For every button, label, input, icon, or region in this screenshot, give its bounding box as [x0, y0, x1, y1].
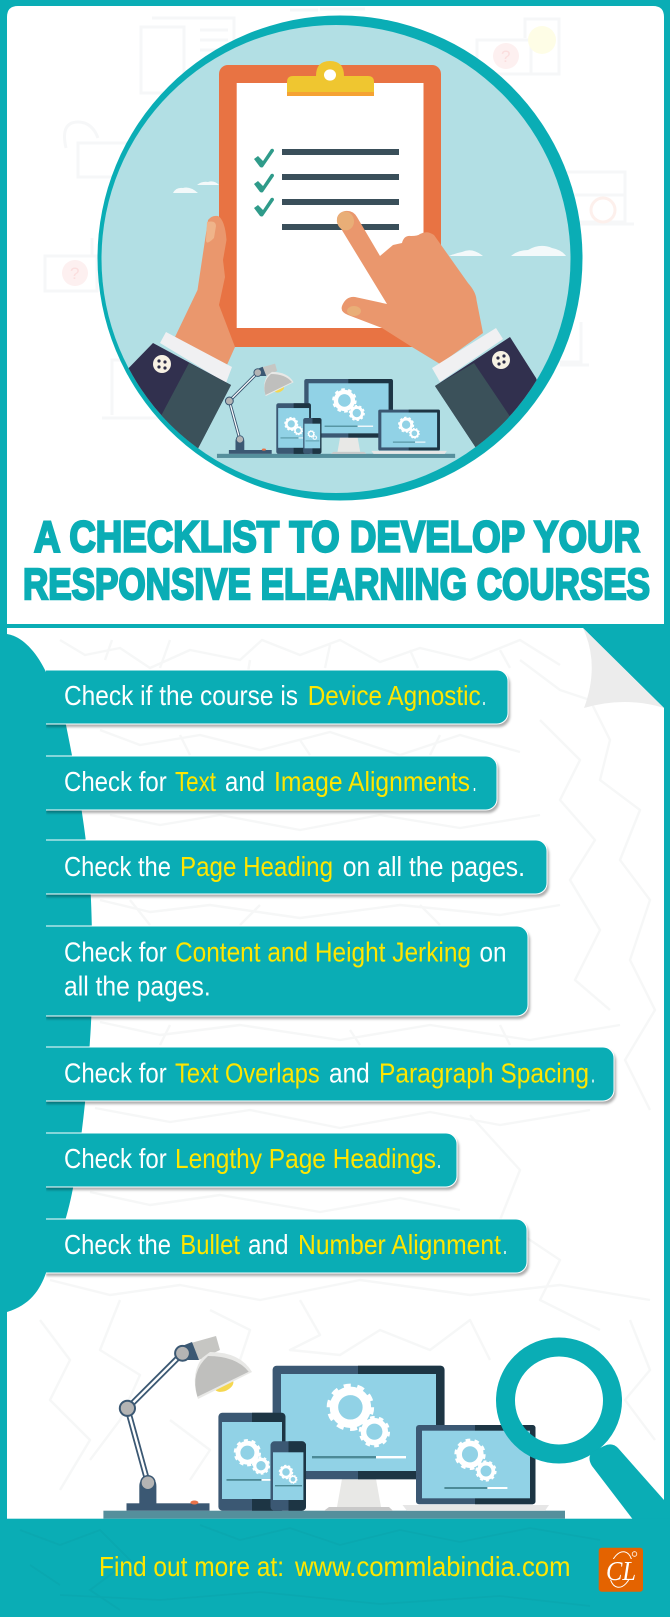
small desk with devices — [217, 364, 455, 458]
faint question bubbles: ? — [501, 47, 510, 66]
logo: CL: CL — [606, 1556, 636, 1586]
clouds — [173, 181, 566, 256]
checklist item 5: Check for — [64, 1058, 167, 1088]
logo: CL — [599, 1548, 643, 1592]
large desk with lamp and devices — [103, 1336, 565, 1519]
checklist item 5: . — [591, 1058, 595, 1088]
checklist item 7: Bullet — [180, 1229, 240, 1260]
checklist item 6 — [46, 1133, 459, 1190]
checklist item 7: Number Alignment — [298, 1229, 501, 1260]
checklist item 1: Device Agnostic — [308, 680, 481, 711]
checklist item 6: Check for — [64, 1143, 167, 1174]
checklist item 5: Paragraph Spacing — [379, 1058, 589, 1088]
faint question bubbles — [62, 26, 556, 286]
faint question bubbles: ? — [70, 264, 79, 283]
left teal curved band — [7, 634, 92, 1312]
icon: magnifying glass — [506, 1347, 664, 1519]
checklist item 4: Content and Height Jerking — [175, 936, 471, 968]
left cuff and sleeve — [128, 332, 232, 448]
checklist item 3: Page Heading — [180, 851, 333, 882]
checklist item 2: Image Alignments — [274, 766, 470, 797]
checklist item 2 — [46, 756, 499, 813]
checklist item 3: on all the pages. — [343, 851, 525, 882]
left hand — [175, 216, 235, 366]
checklist item 1: Check if the course is — [64, 680, 298, 711]
checklist item 7: . — [503, 1229, 507, 1260]
panel: top header — [7, 6, 664, 624]
checklist item 1: . — [482, 680, 486, 711]
checklist item 5: Text Overlaps — [175, 1058, 320, 1088]
faint crack texture — [40, 640, 655, 1490]
checklist item 7 — [46, 1219, 529, 1276]
checklist item 1 — [46, 670, 510, 727]
folded corner — [583, 628, 670, 708]
checklist item 4: all the pages. — [64, 970, 211, 1002]
checklist item 7: Check the — [64, 1229, 171, 1260]
checklist item 2: Check for — [64, 766, 167, 797]
footer band — [0, 1519, 670, 1617]
checklist lines — [282, 149, 399, 230]
checklist item 3: Check the — [64, 851, 171, 882]
checklist item 2: . — [472, 766, 476, 797]
checklist item 6: . — [437, 1143, 441, 1174]
checklist item 4 — [46, 926, 530, 1019]
footer link text: Find out more at: — [99, 1551, 284, 1582]
hands and sleeves — [128, 210, 537, 448]
right cuff and sleeve — [432, 328, 537, 447]
panel: checklist page — [7, 628, 670, 1519]
right hand — [335, 210, 483, 364]
checklist item 7: and — [248, 1229, 288, 1260]
clipboard — [219, 61, 441, 347]
checklist item 3 — [46, 840, 549, 897]
checklist item 4: on — [480, 936, 506, 968]
hero circle illustration — [98, 16, 582, 500]
check marks — [254, 149, 274, 216]
title — [23, 512, 650, 609]
checklist item 5 — [46, 1047, 616, 1104]
checklist item 5: and — [329, 1058, 370, 1088]
clipboard clip — [287, 61, 374, 96]
checklist item 2: Text — [175, 766, 216, 797]
checklist item 6: Lengthy Page Headings — [175, 1143, 436, 1174]
footer link text: www.commlabindia.com — [294, 1551, 570, 1582]
faint background device icons — [45, 9, 634, 418]
checklist item 4: Check for — [64, 936, 167, 968]
checklist item 2: and — [225, 766, 265, 797]
